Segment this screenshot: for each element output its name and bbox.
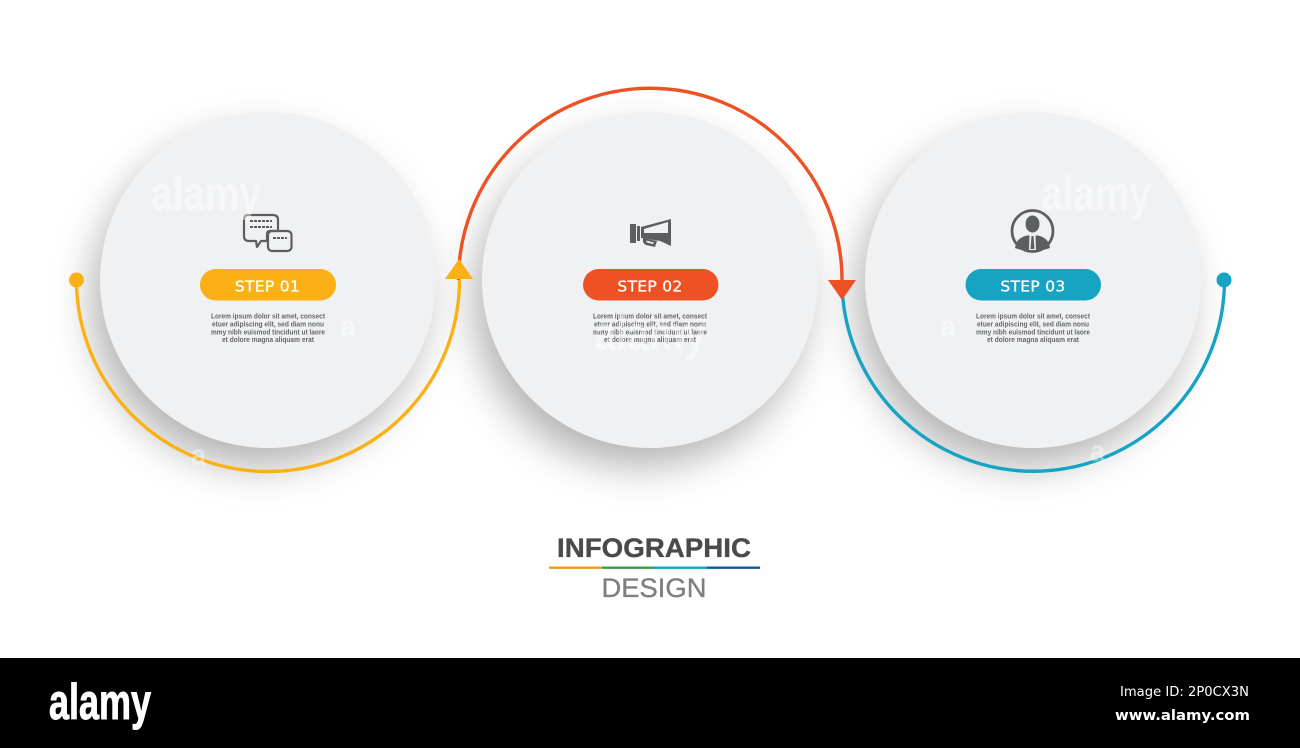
- icon: businessman avatar: [1012, 210, 1053, 252]
- watermark: stock marks over the circles: a: [191, 439, 206, 472]
- title: infographic: INFOGRAPHIC: [557, 533, 751, 563]
- watermark: stock marks over the circles: alamy: [1041, 168, 1151, 221]
- watermark: stock marks over the circles: [151, 168, 1151, 472]
- text: website: www.alamy.com: [1115, 708, 1250, 724]
- badge: step 03: STEP 03: [1000, 278, 1066, 296]
- icon: megaphone: [630, 219, 671, 247]
- badge: step 03: [966, 269, 1101, 300]
- text block: step 02 body: etuer adipiscing elit, sed diam nonu: [594, 320, 706, 328]
- arrow: orange arc: [458, 88, 842, 280]
- text block: step 03 body: Lorem ipsum dolor sit amet, consect: [976, 312, 1091, 320]
- text block: step 02 body: [593, 312, 708, 344]
- text block: step 01 body: [211, 312, 326, 344]
- text block: step 01 body: mmy nibh euismod tincidunt ut laore: [211, 328, 325, 336]
- panel: step 03 circle: [857, 112, 1201, 466]
- subtitle: design: DESIGN: [602, 573, 706, 603]
- logo: alamy: alamy: [49, 674, 151, 730]
- arrow: yellow arc: [69, 272, 460, 472]
- text: image id: Image ID: 2P0CX3N: [1120, 684, 1249, 700]
- badge: step 02: [583, 269, 718, 300]
- text block: step 02 body: Lorem ipsum dolor sit amet, consect: [593, 312, 708, 320]
- arrow: blue arc: [842, 272, 1232, 471]
- badge: step 01: STEP 01: [235, 278, 300, 296]
- text block: step 02 body: mmy nibh euismod tincidunt ut laore: [593, 328, 707, 336]
- text block: step 03 body: mmy nibh euismod tincidunt ut laore: [976, 328, 1090, 336]
- text block: step 01 body: et dolore magna aliquam erat: [222, 336, 315, 344]
- watermark: stock marks over the circles: a: [340, 310, 356, 343]
- footer: black band: [0, 658, 1300, 748]
- text block: step 01 body: etuer adipiscing elit, sed diam nonu: [212, 320, 324, 328]
- arrowhead: orange down: [828, 280, 856, 300]
- text block: step 03 body: et dolore magna aliquam erat: [987, 336, 1080, 344]
- watermark: stock marks over the circles: a: [1090, 435, 1105, 468]
- text block: step 01 body: Lorem ipsum dolor sit amet, consect: [211, 312, 326, 320]
- watermark: stock marks over the circles: a: [940, 310, 956, 343]
- text block: step 03 body: [976, 312, 1091, 344]
- watermark: stock marks over the circles: alamy: [594, 308, 706, 361]
- arrowhead: yellow up: [445, 259, 473, 279]
- icon: chat bubbles: [244, 215, 292, 251]
- text block: step 02 body: et dolore magna aliquam erat: [604, 336, 697, 344]
- panel: step 02 circle: [474, 112, 818, 466]
- text block: step 03 body: etuer adipiscing elit, sed diam nonu: [977, 320, 1089, 328]
- divider: four colour rule: [549, 566, 760, 569]
- panel: step 01 circle: [92, 112, 436, 466]
- badge: step 02: STEP 02: [617, 278, 683, 296]
- badge: step 01: [200, 269, 336, 300]
- watermark: stock marks over the circles: alamy: [151, 168, 261, 221]
